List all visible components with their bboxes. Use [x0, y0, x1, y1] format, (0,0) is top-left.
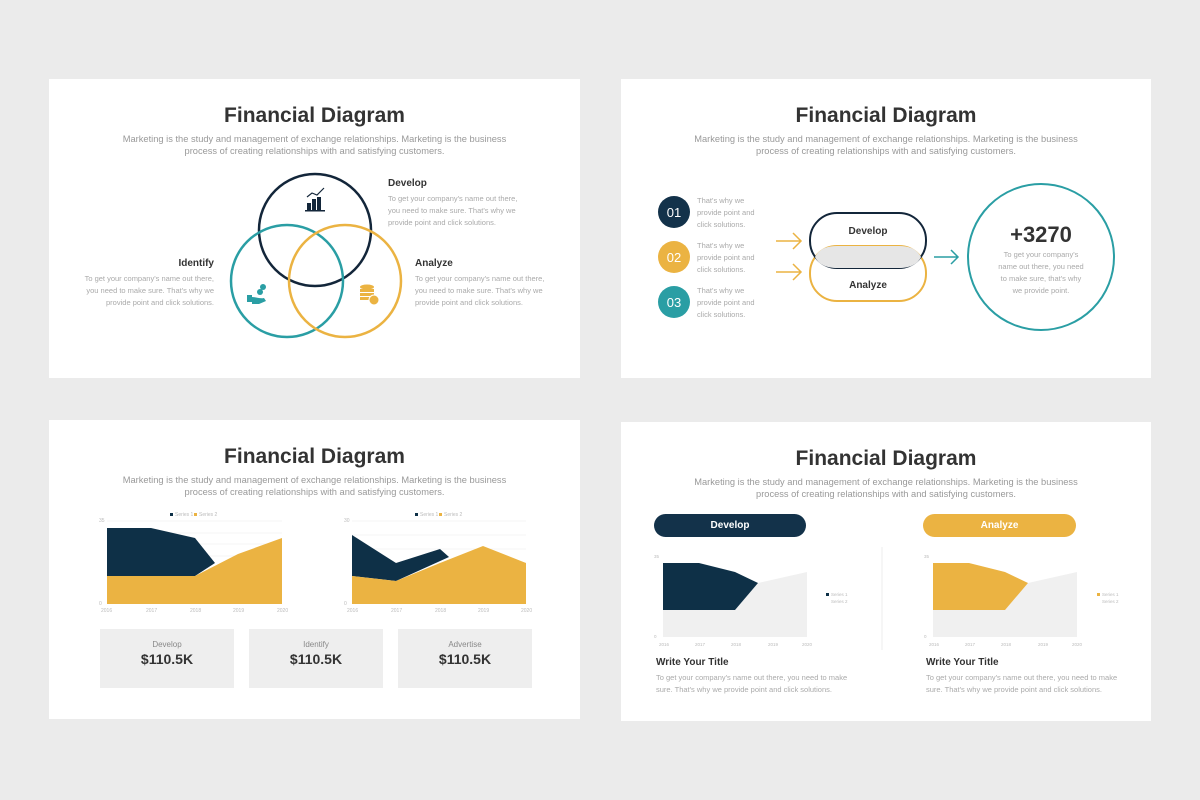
text: right title: To get your company's name out there, you need to make — [926, 673, 1117, 682]
stat boxes: Develop — [152, 640, 182, 649]
area charts: 2020 — [521, 608, 532, 614]
text: develop: you need to make sure. That's why we — [388, 206, 516, 215]
charts: 2018 — [1001, 642, 1012, 647]
panel: area charts: $110.5K — [290, 651, 342, 667]
text: left title — [656, 657, 847, 694]
charts: 2016 — [929, 642, 940, 647]
area charts: 2018 — [190, 608, 201, 614]
pill: analyze — [923, 514, 1076, 537]
charts: 2020 — [1072, 642, 1083, 647]
step texts: click solutions. — [697, 220, 745, 229]
area charts: 0 — [99, 601, 102, 607]
stat boxes: $110.5K — [141, 651, 193, 667]
charts: 2019 — [1038, 642, 1049, 647]
text: identify: Identify — [178, 258, 214, 269]
text: left title: Write Your Title — [656, 657, 729, 668]
panel: area charts: $110.5K — [439, 651, 491, 667]
charts: 35 — [924, 554, 930, 559]
charts: 35 — [654, 554, 660, 559]
panel: process diagram: provide point and — [697, 253, 755, 262]
text: analyze: Analyze — [415, 258, 453, 269]
area charts: 2017 — [391, 608, 402, 614]
step texts — [697, 196, 755, 229]
text: identify — [84, 258, 214, 307]
panel: process diagram: That's why we — [697, 286, 744, 295]
subtitle — [694, 134, 1078, 156]
numbered steps: +3270 — [1010, 222, 1072, 247]
venn circles — [230, 172, 402, 338]
text: identify: provide point and click solutions. — [106, 298, 214, 307]
numbered steps: 01 — [667, 205, 681, 220]
text: analyze — [415, 258, 544, 307]
charts: Series 2 — [831, 599, 848, 604]
title: Financial Diagram — [224, 104, 405, 127]
panel: process diagram: click solutions. — [697, 310, 745, 319]
panel: area charts: Advertise — [448, 640, 482, 649]
text: analyze: you need to make sure. That's why we — [415, 286, 543, 295]
area charts: 2017 — [146, 608, 157, 614]
text: develop: Develop — [388, 178, 427, 189]
charts: 2016 — [659, 642, 670, 647]
panel: process diagram: provide point and — [697, 298, 755, 307]
step texts: That's why we — [697, 196, 744, 205]
text: left title: To get your company's name out there, you need to make — [656, 673, 847, 682]
charts: Series 2 — [1102, 599, 1119, 604]
area charts: 2020 — [277, 608, 288, 614]
big circle text: we provide point. — [1013, 286, 1069, 295]
subtitle: process of creating relationships with and satisfying customers. — [185, 487, 444, 497]
charts: 2020 — [802, 642, 813, 647]
subtitle: Marketing is the study and management of exchange relationships. Marketing is the business — [694, 134, 1078, 144]
text: identify: you need to make sure. That's why we — [86, 286, 214, 295]
charts: Series 1 — [1102, 592, 1119, 597]
panel: process diagram — [621, 79, 1151, 378]
pill: analyze: Analyze — [981, 520, 1018, 531]
step texts: provide point and — [697, 208, 755, 217]
panel: process diagram: click solutions. — [697, 265, 745, 274]
area charts: 30 — [344, 518, 350, 524]
pill: develop — [654, 514, 806, 537]
pill: develop: Develop — [711, 520, 749, 531]
area charts: 35 — [99, 518, 105, 524]
text: analyze: provide point and click solutions. — [415, 298, 523, 307]
area charts: Series 2 — [199, 512, 218, 518]
text: analyze: To get your company's name out there, — [415, 274, 544, 283]
area charts: 2016 — [347, 608, 358, 614]
area charts: 2018 — [435, 608, 446, 614]
text: right title — [926, 657, 1117, 694]
big circle text: to make sure, that's why — [1001, 274, 1081, 283]
numbered steps: Develop — [849, 226, 887, 237]
text: develop: To get your company's name out there, — [388, 194, 517, 203]
charts: 2018 — [731, 642, 742, 647]
charts: 2019 — [768, 642, 779, 647]
text: left title: sure. That's why we provide point and click solutions. — [656, 685, 832, 694]
area charts: 2019 — [233, 608, 244, 614]
subtitle — [123, 134, 506, 156]
area charts: 2016 — [101, 608, 112, 614]
subtitle: process of creating relationships with and satisfying customers. — [756, 146, 1016, 156]
charts: 0 — [654, 634, 657, 639]
big circle text: To get your company's — [1004, 250, 1078, 259]
panel: two charts with titles — [621, 422, 1151, 721]
title: Financial Diagram — [796, 104, 976, 127]
numbered steps — [658, 183, 1115, 331]
subtitle: process of creating relationships with and satisfying customers. — [185, 146, 444, 156]
numbered steps: 02 — [667, 250, 681, 265]
area charts: 0 — [344, 601, 347, 607]
big circle text: name out there, you need — [998, 262, 1084, 271]
numbered steps: Analyze — [849, 280, 887, 291]
text: right title: Write Your Title — [926, 657, 999, 668]
subtitle — [123, 475, 506, 497]
panel: area charts — [49, 420, 580, 719]
charts: 2017 — [965, 642, 976, 647]
text: identify: To get your company's name out there, — [85, 274, 214, 283]
text: right title: sure. That's why we provide point and click solutions. — [926, 685, 1102, 694]
charts: Series 1 — [831, 592, 848, 597]
title: Financial Diagram — [796, 447, 976, 470]
area charts: Series 1 — [175, 512, 194, 518]
area charts: Series 2 — [444, 512, 463, 518]
title: Financial Diagram — [224, 445, 405, 468]
panel: venn diagram — [49, 79, 580, 378]
subtitle: process of creating relationships with and satisfying customers. — [756, 489, 1016, 499]
subtitle: Marketing is the study and management of exchange relationships. Marketing is the business — [694, 477, 1078, 487]
charts: 0 — [924, 634, 927, 639]
stat boxes — [100, 629, 234, 688]
big circle text — [998, 250, 1084, 295]
panel: area charts: Identify — [303, 640, 329, 649]
text: develop — [388, 178, 517, 227]
panel: process diagram: That's why we — [697, 241, 744, 250]
subtitle — [694, 477, 1078, 499]
text: develop: provide point and click solutions. — [388, 218, 496, 227]
area charts — [99, 512, 532, 614]
subtitle: Marketing is the study and management of exchange relationships. Marketing is the business — [123, 134, 506, 144]
charts: 2017 — [695, 642, 706, 647]
area charts: Series 1 — [420, 512, 439, 518]
charts — [654, 547, 1119, 650]
area charts: 2019 — [478, 608, 489, 614]
numbered steps: 03 — [667, 295, 681, 310]
subtitle: Marketing is the study and management of exchange relationships. Marketing is the business — [123, 475, 506, 485]
